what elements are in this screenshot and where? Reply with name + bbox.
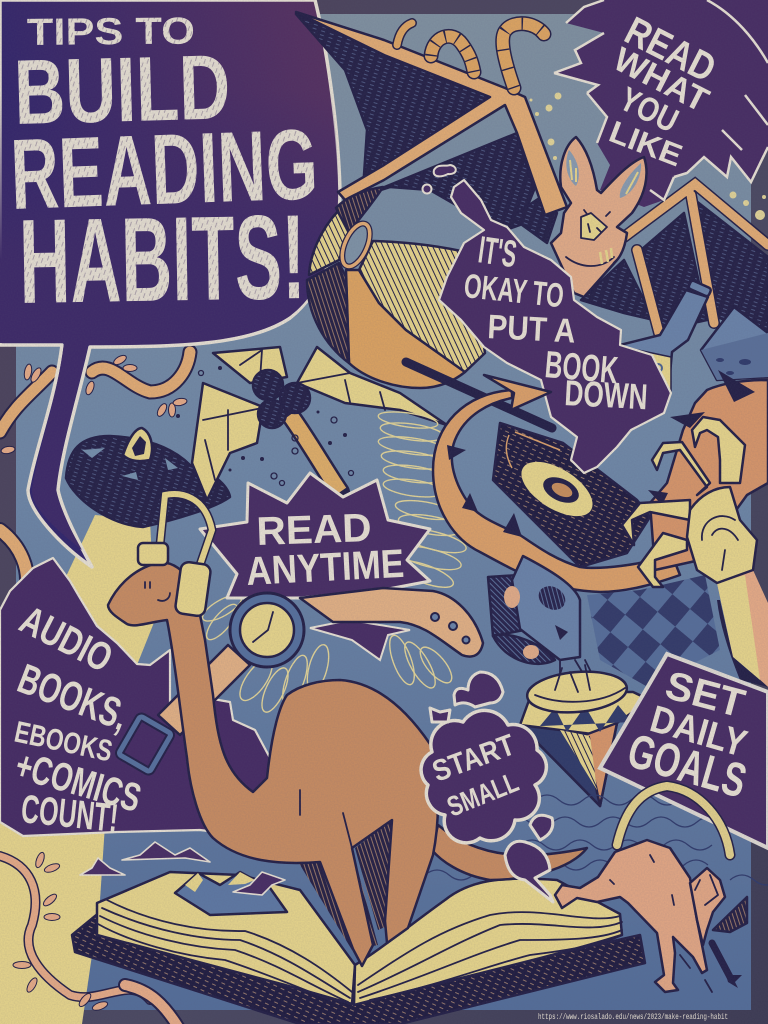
read what you like text: LIKE <box>604 114 687 173</box>
start small cloud <box>421 710 546 843</box>
scribble coil <box>199 409 468 716</box>
title text: HABITS! <box>18 190 306 329</box>
strap <box>300 588 483 657</box>
audio books text <box>11 598 146 841</box>
dark stick <box>406 362 552 428</box>
open book <box>72 872 645 1024</box>
cheese wedge <box>701 307 768 380</box>
fingers <box>622 417 745 587</box>
okay to put a book down text: IT'S <box>476 229 519 276</box>
set daily goals sign <box>600 654 768 848</box>
camel leg crease <box>300 790 352 848</box>
read what you like text: READ <box>618 9 723 91</box>
bat right wing <box>581 184 768 337</box>
left yellow wedge <box>309 210 349 275</box>
okay to put a book down text <box>462 229 649 417</box>
vine over book <box>125 985 180 1024</box>
bat left wing membranes <box>296 14 557 243</box>
palm <box>687 487 757 583</box>
start small text: START <box>428 728 519 789</box>
lens <box>337 220 375 270</box>
camel body <box>108 562 438 966</box>
wavy water lines <box>425 795 768 885</box>
yellow beam and lower-left paper <box>0 515 155 1024</box>
left page <box>97 872 355 1004</box>
forearm <box>717 570 768 687</box>
audio books text: BOOKS, <box>12 655 135 739</box>
worms <box>397 23 544 88</box>
potion bottle <box>620 280 712 400</box>
start small text <box>428 728 523 823</box>
okay to put a book down blob <box>439 180 671 473</box>
start small text: SMALL <box>443 766 523 823</box>
set daily goals text <box>622 663 752 809</box>
read anytime text <box>245 506 405 594</box>
vinyl record <box>493 423 650 567</box>
bat wing bones <box>296 12 567 215</box>
ball with hatching <box>307 187 552 428</box>
camel <box>108 562 587 966</box>
clock face <box>230 593 304 667</box>
title text: READING <box>9 108 320 231</box>
thought puffs <box>430 672 553 902</box>
audio books text: EBOOKS <box>12 716 115 768</box>
okay to put a book down text: OKAY TO <box>462 267 566 315</box>
audio books bubble <box>0 558 280 841</box>
mountain on book <box>175 872 287 915</box>
audio books text: AUDIO <box>13 598 119 681</box>
arm and claw hand <box>622 370 768 687</box>
moth <box>488 556 595 685</box>
gem <box>520 665 650 806</box>
okay to put a book down text: PUT A <box>487 308 576 351</box>
read what you like text <box>604 9 723 173</box>
top dark wedge <box>336 187 383 233</box>
shadow hatch behind camel legs <box>297 820 392 950</box>
vines <box>0 352 190 1012</box>
read anytime starburst <box>200 473 430 660</box>
camel face <box>145 582 170 601</box>
wristwatch <box>118 588 483 772</box>
sparkle dots near bat <box>530 92 766 220</box>
clouds <box>80 842 285 895</box>
read what you like text: YOU <box>613 80 684 140</box>
checkered cloth <box>587 575 720 690</box>
okay to put a book down text: BOOK <box>543 344 620 392</box>
title speech bubble <box>0 0 340 567</box>
orange shoulder <box>650 380 768 570</box>
potion bottle and cheese <box>620 280 768 400</box>
book cover <box>72 912 645 1024</box>
okay to put a book down text: DOWN <box>564 372 649 417</box>
bat head <box>551 137 647 297</box>
title text: TIPS TO <box>27 11 195 54</box>
devil tail with arrow tip <box>433 375 680 592</box>
bottom-left dark wedge <box>307 263 349 363</box>
read anytime text: READ <box>256 506 372 554</box>
rat <box>555 786 747 992</box>
orange ball panel <box>346 270 465 388</box>
buckle <box>118 716 172 772</box>
palm tree <box>176 347 447 500</box>
read what you like text: WHAT <box>607 40 715 120</box>
arm spikes <box>648 370 755 505</box>
yellow hatched wedge <box>359 241 485 372</box>
right page <box>354 879 622 1005</box>
set daily goals text: SET <box>661 663 749 726</box>
small purple drops <box>422 165 456 194</box>
read what you like burst <box>554 0 768 207</box>
audio books text: COUNT! <box>19 787 120 841</box>
title text: BUILD <box>13 36 231 144</box>
title text <box>9 11 320 329</box>
set daily goals text: DAILY <box>646 698 751 766</box>
headphones <box>138 494 212 617</box>
bat <box>296 12 768 337</box>
audio books text: +COMICS <box>11 743 146 821</box>
read anytime text: ANYTIME <box>245 542 405 594</box>
flying saucer <box>66 428 230 527</box>
camel tail <box>432 825 587 880</box>
